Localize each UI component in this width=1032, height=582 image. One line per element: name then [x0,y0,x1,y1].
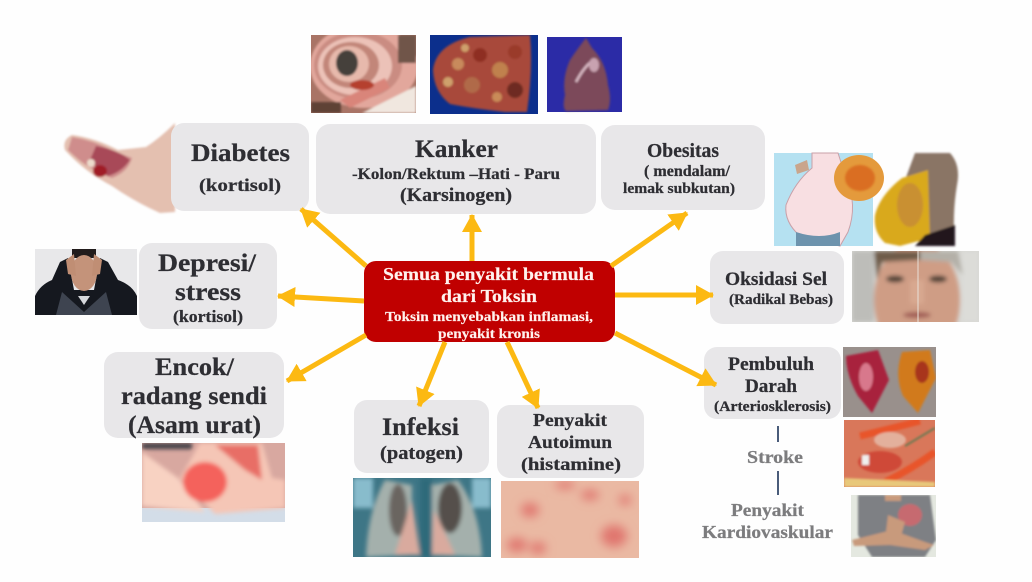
panel: Infeksi: Infeksi [382,414,459,441]
panel: Pembuluh Darah [704,347,841,419]
panel: Obesitas: lemak subkutan) [623,181,735,197]
panel: Penyakit Autoimun: (histamine) [521,454,621,475]
panel: Penyakit Autoimun: Autoimun [528,432,612,452]
panel: Depresi / stress: (kortisol) [173,307,243,326]
photo: liver tumour [430,35,538,114]
panel: Pembuluh Darah: Pembuluh [728,354,814,375]
panel: Kanker [316,124,596,214]
photo: healthy and damaged hearts [843,347,936,417]
panel: Obesitas: Obesitas [647,140,719,162]
label: Stroke: Stroke [747,447,803,467]
panel: Obesitas: ( mendalam/ [644,163,731,180]
panel: centre message: Toksin menyebabkan inflamasi, [385,310,593,325]
panel: Oksidasi Sel: Oksidasi Sel [725,269,827,290]
photo: man holding chest [851,495,936,557]
photo: skin rash [501,481,639,558]
panel: Obesitas [601,125,765,210]
panel: centre message [364,261,615,342]
photo: fat tissue cross-section [875,153,958,246]
panel: Pembuluh Darah: (Arteriosklerosis) [714,399,831,415]
photo: ageing face [852,251,979,322]
panel: Pembuluh Darah: Darah [745,376,797,397]
panel: Diabetes [171,123,309,211]
connector lines [777,426,779,495]
panel: Oksidasi Sel: (Radikal Bebas) [729,292,833,308]
panel: Kanker: -Kolon/Rektum –Hati - Paru [352,166,560,183]
panel: Infeksi: (patogen) [380,443,463,464]
arrows from centre box to each condition [278,209,716,408]
label: Penyakit Kardiovaskular: Penyakit [731,500,804,520]
panel: centre message: dari Toksin [441,286,537,306]
panel: Kanker: (Karsinogen) [400,185,512,206]
panel: Oksidasi Sel [710,251,844,324]
panel: Encok / radang sendi [104,352,284,439]
panel: centre message: Semua penyakit bermula [383,264,594,284]
panel: centre message: penyakit kronis [438,327,541,342]
label: Penyakit Kardiovaskular: Kardiovaskular [702,522,833,542]
photo: inflamed knee [142,443,285,522]
panel: Encok / radang sendi: radang sendi [121,383,267,410]
panel: Depresi / stress [139,243,277,329]
panel: Diabetes: Diabetes [191,140,290,167]
photo: stressed man [35,249,137,315]
label: Penyakit Kardiovaskular [702,500,833,542]
photo: obesity illustration [774,153,884,246]
photo: chest x-ray [353,478,491,557]
panel: Penyakit Autoimun [497,405,644,478]
panel: Diabetes: (kortisol) [199,175,281,196]
panel: Infeksi [354,400,489,473]
photo: lung specimen [547,37,622,112]
photo: diabetic foot [64,123,175,213]
panel: Depresi / stress: stress [175,279,241,306]
photo: stroke surgery [844,420,935,487]
panel: Encok / radang sendi: (Asam urat) [128,412,261,439]
panel: Penyakit Autoimun: Penyakit [533,410,607,430]
panel: Depresi / stress: Depresi/ [158,250,257,277]
panel: Kanker: Kanker [415,136,498,163]
photo: colon interior [311,35,416,113]
panel: Encok / radang sendi: Encok/ [155,354,235,381]
